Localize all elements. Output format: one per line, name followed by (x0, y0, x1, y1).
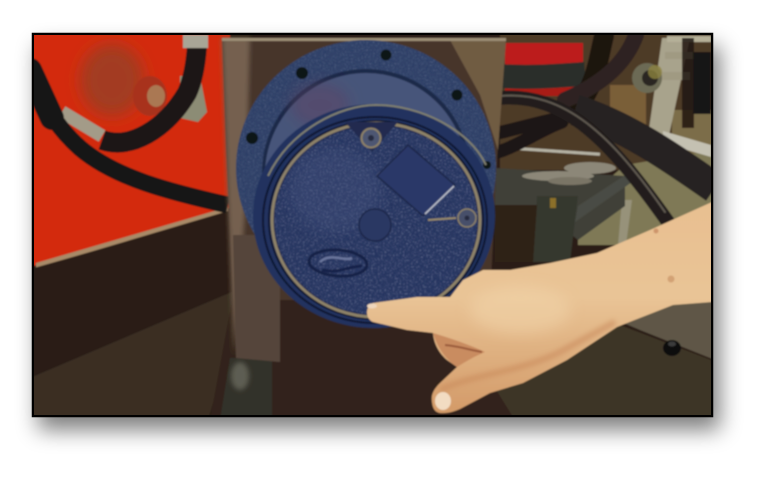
dark motor top right (693, 52, 711, 114)
motor: centre plug (359, 209, 391, 241)
panel: red wall (30, 30, 230, 268)
bolt on floor (663, 340, 681, 356)
hand pointing at motor (367, 202, 712, 413)
aluminium frame (648, 38, 690, 140)
machinery background right (495, 30, 717, 262)
wrenches on bench (520, 147, 616, 185)
dark lower wall (35, 256, 76, 269)
red pipe fitting (133, 76, 167, 116)
photo drop shadow (38, 46, 720, 430)
photo frame (33, 34, 712, 416)
motor: logo (308, 248, 368, 278)
right bright wall (671, 109, 711, 154)
motor: raised nameplate pad (377, 145, 455, 216)
stand base (220, 358, 272, 420)
gray bracket (180, 76, 207, 122)
floor left (30, 292, 232, 420)
hoses left (30, 35, 228, 205)
motor: mounting flange (236, 39, 497, 234)
motor: right bolt (428, 209, 476, 227)
red panel behind hoses (505, 43, 583, 65)
wheel (632, 63, 662, 93)
floor centre (216, 314, 496, 415)
floor right (495, 325, 715, 420)
motor: body (253, 104, 495, 328)
infographic canvas (22, 30, 736, 446)
photo: final drive motor on a test stand (30, 30, 720, 420)
bench (495, 168, 625, 240)
hoses right (498, 35, 715, 222)
background: dark workshop (30, 30, 720, 420)
motor: top bolt (345, 122, 398, 152)
stand plate (222, 38, 506, 362)
